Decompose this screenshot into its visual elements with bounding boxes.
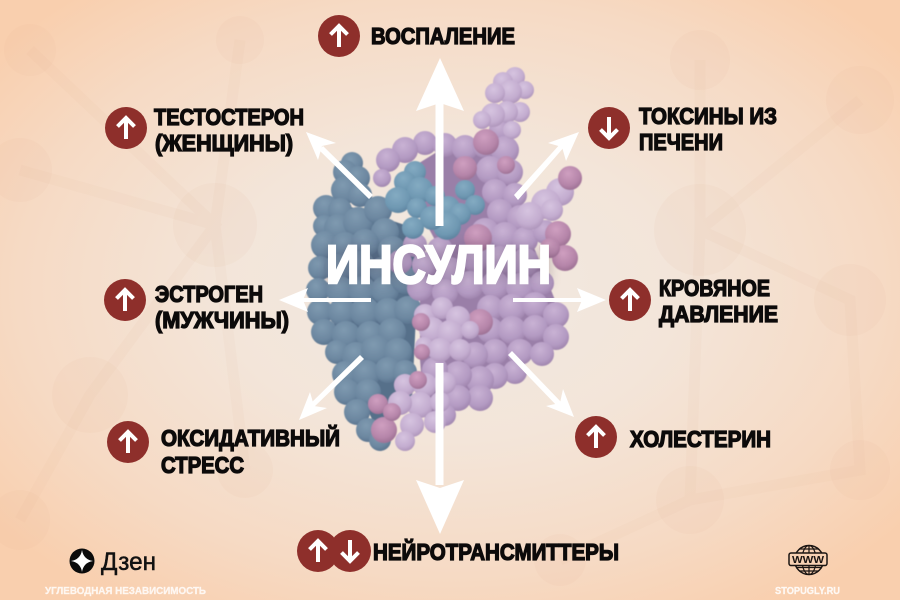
arrow: to liver toxins bbox=[514, 132, 579, 200]
item: oxidative stress up: ОКСИДАТИВНЫЙ bbox=[161, 424, 340, 451]
item: testosterone in women up: ТЕСТОСТЕРОН bbox=[154, 104, 304, 130]
item: liver toxins down bbox=[588, 103, 777, 155]
item: liver toxins down: ПЕЧЕНИ bbox=[639, 129, 723, 155]
item: liver toxins down: ТОКСИНЫ ИЗ bbox=[639, 103, 777, 129]
molecule: insulin bbox=[306, 67, 582, 451]
item: estrogen in men up: (МУЖЧИНЫ) bbox=[155, 307, 289, 333]
item: inflammation up: ВОСПАЛЕНИЕ bbox=[371, 23, 515, 49]
icon: www globe: WWW bbox=[792, 555, 825, 566]
item: oxidative stress up bbox=[107, 421, 340, 478]
footer: channel name: УГЛЕВОДНАЯ НЕЗАВИСИМОСТЬ bbox=[45, 586, 206, 597]
arrow: to cholesterol bbox=[508, 351, 574, 417]
item: estrogen in men up bbox=[104, 279, 289, 333]
item: blood pressure up bbox=[609, 275, 778, 327]
title: insulin: ИНСУЛИН bbox=[325, 235, 552, 295]
blue chain bbox=[306, 152, 422, 451]
item: blood pressure up: ДАВЛЕНИЕ bbox=[659, 301, 778, 327]
logo: Dzen: Дзен bbox=[101, 548, 156, 576]
arrow: to testosterone bbox=[306, 132, 373, 199]
item: cholesterol up: ХОЛЕСТЕРИН bbox=[630, 426, 771, 452]
arrow: to oxidative stress bbox=[299, 355, 364, 420]
arrow: to blood pressure bbox=[513, 288, 606, 312]
lighter lumps bbox=[388, 297, 479, 451]
right arm and top nub bbox=[473, 67, 574, 230]
item: blood pressure up: КРОВЯНОЕ bbox=[659, 275, 770, 301]
item: oxidative stress up: СТРЕСС bbox=[161, 452, 244, 478]
item: neurotransmitters up and down: НЕЙРОТРАНСМИТТЕРЫ bbox=[373, 538, 619, 565]
icon: www globe bbox=[789, 546, 827, 575]
item: cholesterol up bbox=[575, 416, 771, 458]
arrow: up to inflammation bbox=[416, 58, 464, 226]
footer: website: STOPUGLY.RU bbox=[775, 586, 840, 597]
item: testosterone in women up bbox=[105, 104, 304, 156]
arrow: to estrogen bbox=[279, 288, 371, 312]
pink highlights bbox=[453, 129, 582, 335]
item: inflammation up bbox=[318, 15, 515, 57]
item: neurotransmitters up and down bbox=[297, 530, 619, 572]
blue lump near centre top bbox=[385, 161, 485, 240]
item: testosterone in women up: (ЖЕНЩИНЫ) bbox=[155, 130, 293, 156]
logo: Dzen bbox=[70, 548, 156, 576]
purple chain bbox=[373, 119, 569, 426]
pink lower left lump bbox=[368, 313, 430, 443]
title: insulin: ИНСУЛИН bbox=[326, 235, 551, 295]
arrow: down to neurotransmitters bbox=[416, 363, 464, 534]
item: estrogen in men up: ЭСТРОГЕН bbox=[155, 281, 263, 307]
